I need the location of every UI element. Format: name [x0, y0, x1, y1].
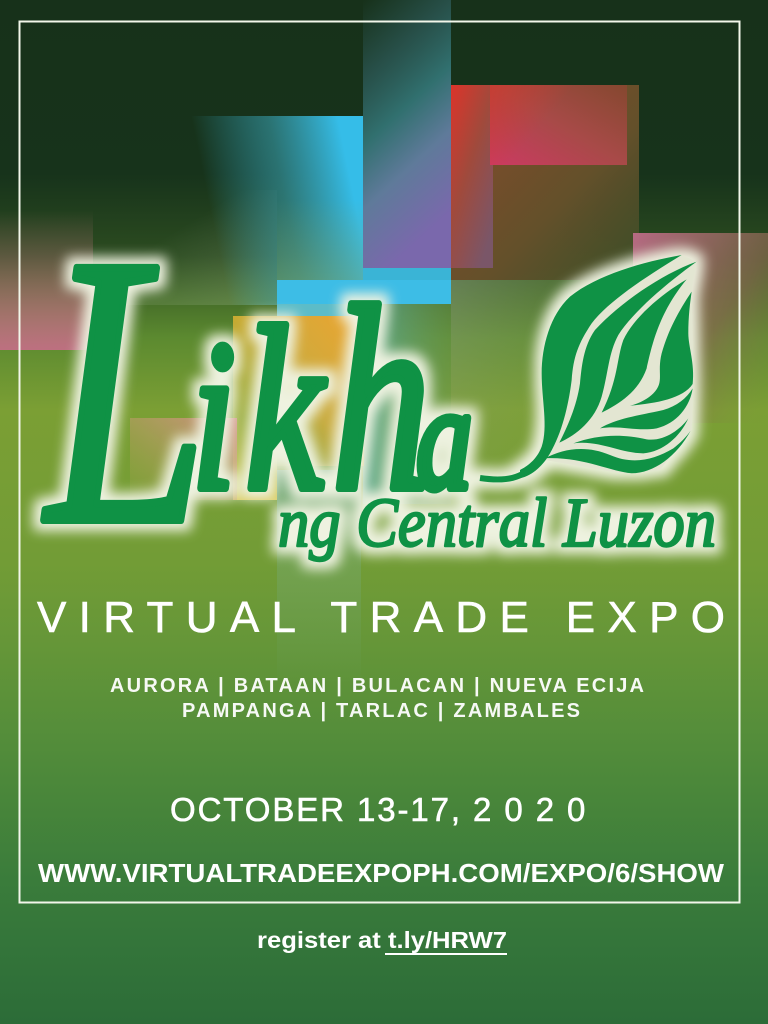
wordmark: Likha: a — [416, 354, 473, 521]
wordmark: Likha: k — [245, 279, 327, 539]
logo with glow — [42, 177, 716, 604]
stem joining the a — [480, 473, 524, 479]
leaf pale base — [538, 255, 697, 473]
wordmark: Likha: h — [332, 252, 431, 546]
blade 4 — [630, 292, 693, 406]
provinces line 1: AURORA | BATAAN | BULACAN | NUEVA ECIJA — [110, 675, 644, 697]
blade 5 — [600, 388, 693, 429]
heading: virtual trade expo: VIRTUAL TRADE EXPO — [37, 593, 725, 642]
blade 3 — [602, 279, 687, 413]
blade 2 — [559, 262, 697, 443]
provinces line 2: PAMPANGA | TARLAC | ZAMBALES — [182, 700, 580, 722]
register text: register at t.ly/HRW7 — [257, 927, 507, 953]
wordmark: Likha: L — [42, 177, 207, 604]
wordmark: Likha: i — [191, 298, 236, 536]
leaf icon — [520, 255, 697, 478]
blade 7 — [545, 431, 691, 473]
website url: WWW.VIRTUALTRADEEXPOPH.COM/EXPO/6/SHOW — [38, 858, 724, 888]
underline — [385, 953, 507, 955]
colour block collage — [0, 0, 768, 685]
event dates: OCTOBER 13-17, 2020 — [170, 791, 598, 828]
provinces list — [110, 675, 644, 722]
tagline: ng Central Luzon: ng Central Luzon — [278, 485, 716, 562]
blade 6 — [573, 418, 688, 453]
blade 1 with stem — [520, 255, 682, 478]
